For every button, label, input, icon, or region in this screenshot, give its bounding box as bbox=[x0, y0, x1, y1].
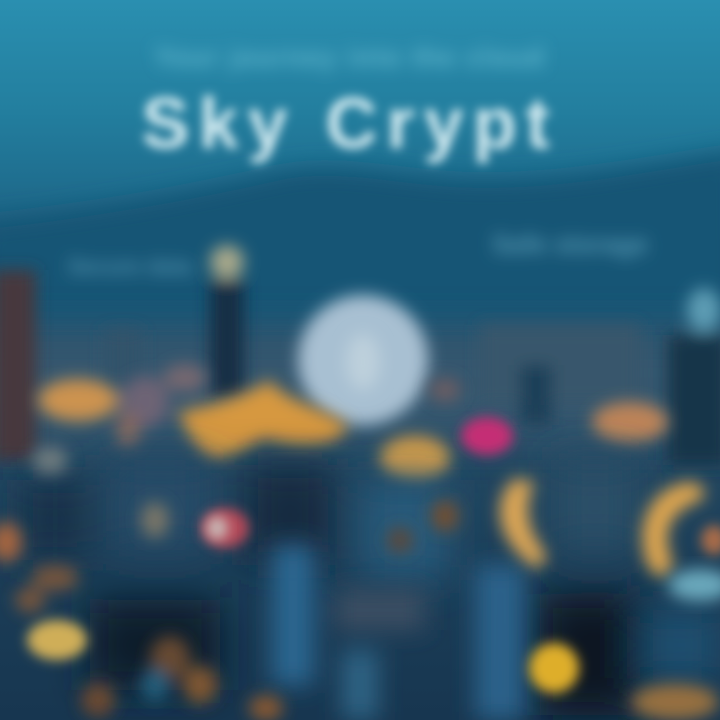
yellow round light bbox=[529, 643, 579, 693]
city skyline bbox=[0, 245, 720, 465]
orange crescent right bbox=[642, 482, 704, 576]
main title: Sky Crypt bbox=[141, 84, 559, 164]
moon crypto coin bbox=[298, 295, 428, 425]
right orange dot bbox=[701, 525, 720, 555]
orange crescent centre bbox=[500, 478, 545, 568]
red coin light bbox=[201, 508, 249, 548]
right tower bbox=[668, 335, 720, 465]
left brown tower bbox=[0, 270, 36, 460]
coin symbol bbox=[346, 334, 380, 390]
small building lights bbox=[0, 446, 459, 720]
lower city blocks bbox=[20, 460, 720, 715]
lit vertical facades bbox=[272, 545, 525, 720]
bottom right orange glow bbox=[631, 684, 719, 720]
caption left: Secure data bbox=[68, 254, 193, 279]
right teal arc bbox=[668, 569, 720, 601]
title bbox=[141, 42, 559, 164]
right tower top bbox=[687, 288, 720, 332]
central tower bbox=[210, 280, 244, 398]
distant buildings bbox=[480, 325, 640, 405]
yellow sign bbox=[27, 620, 87, 660]
pink accent bbox=[461, 417, 513, 455]
subtitle line: Your journey into the cloud bbox=[155, 42, 545, 72]
mountain range bbox=[0, 150, 720, 340]
tower top light bbox=[210, 245, 244, 279]
glowing orange lights bbox=[38, 364, 668, 480]
city haze band bbox=[0, 330, 720, 440]
white core of red light bbox=[206, 516, 228, 540]
caption right: Safe storage bbox=[492, 229, 648, 259]
